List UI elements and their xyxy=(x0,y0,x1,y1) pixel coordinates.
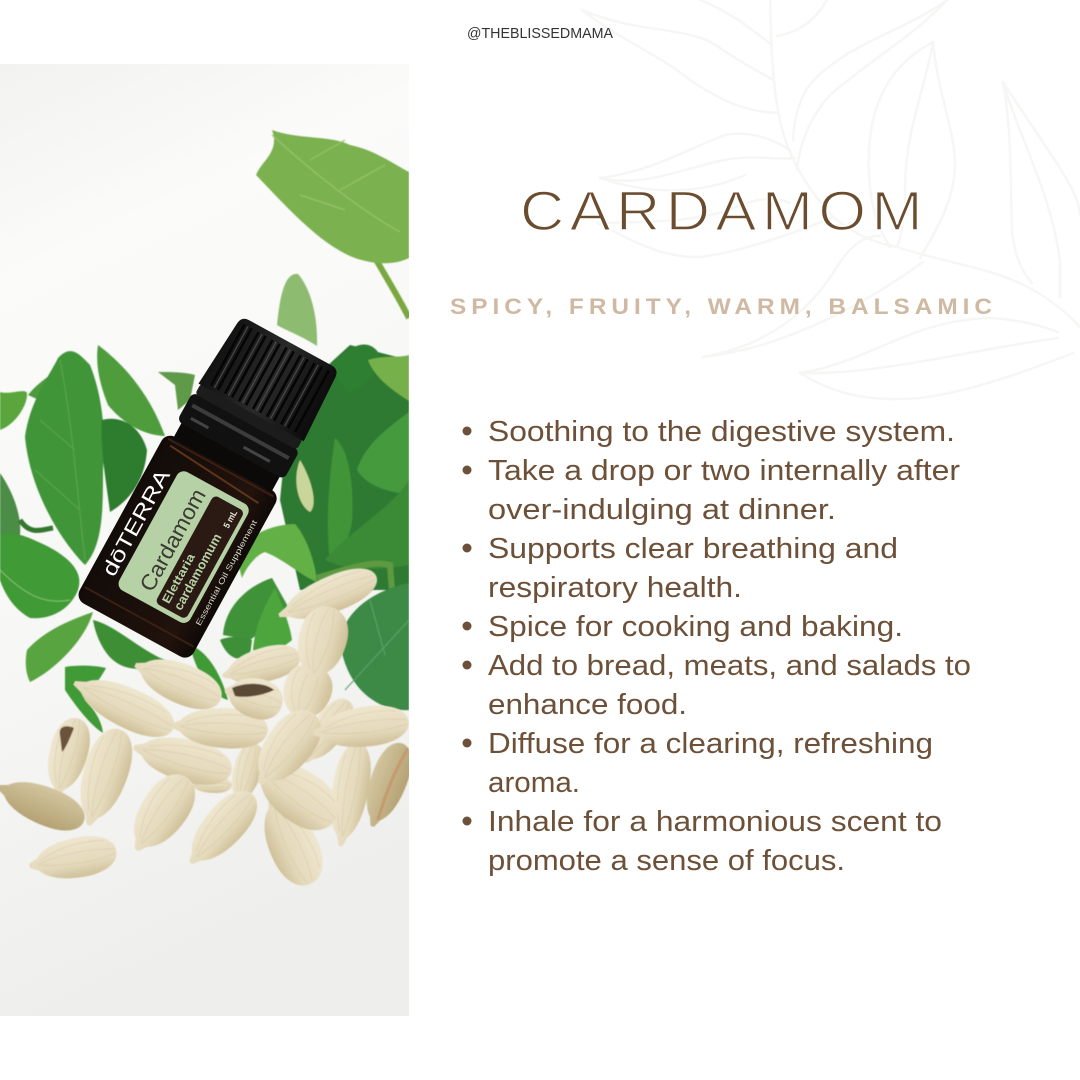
bullet: cooking: Spice for cooking and baking. xyxy=(488,611,903,643)
bullet: breathing: Supports clear breathing and xyxy=(488,533,898,565)
bullet: inhale xyxy=(462,806,942,877)
title: CARDAMOM xyxy=(520,179,928,242)
bullet: diffuse: Diffuse for a clearing, refreshing xyxy=(488,728,933,760)
product label: Cardamom xyxy=(135,484,211,596)
bullet: food xyxy=(462,650,971,721)
bullet: food: Add to bread, meats, and salads to xyxy=(488,650,971,682)
bullet: food: enhance food. xyxy=(488,689,687,721)
bullet: after dinner: Take a drop or two internally after xyxy=(488,455,960,487)
bullet: inhale: promote a sense of focus. xyxy=(488,845,845,877)
bottle body xyxy=(75,432,280,661)
bottle collar xyxy=(174,385,302,492)
supplement text: Essential Oil Supplement xyxy=(194,518,260,627)
product label xyxy=(116,468,252,626)
subtitle: SPICY, FRUITY, WARM, BALSAMIC xyxy=(450,294,997,319)
product label: cardamomum xyxy=(171,531,224,613)
bullet: digestive: Soothing to the digestive system. xyxy=(488,416,955,448)
bullet list xyxy=(462,416,971,877)
green leaves xyxy=(0,130,409,733)
handle: @THEBLISSEDMAMA xyxy=(467,25,613,42)
bullet: inhale: Inhale for a harmonious scent to xyxy=(488,806,942,838)
essential oil bottle xyxy=(75,311,347,661)
decorative leaf line art xyxy=(582,0,1080,399)
bullet: after dinner: over-indulging at dinner. xyxy=(488,494,836,526)
panel: product photo xyxy=(0,64,419,1016)
bullet: breathing: respiratory health. xyxy=(488,572,742,604)
bottle cap xyxy=(198,313,342,441)
brand text: dōTERRA xyxy=(98,466,175,580)
bullet: diffuse xyxy=(462,728,933,799)
cardamom pods xyxy=(0,560,419,894)
bullet: after dinner xyxy=(462,455,960,526)
bullet: breathing xyxy=(462,533,898,604)
product label: Elettaria xyxy=(159,551,198,606)
product label: 5 mL xyxy=(221,508,239,530)
bullet: diffuse: aroma. xyxy=(488,767,580,799)
